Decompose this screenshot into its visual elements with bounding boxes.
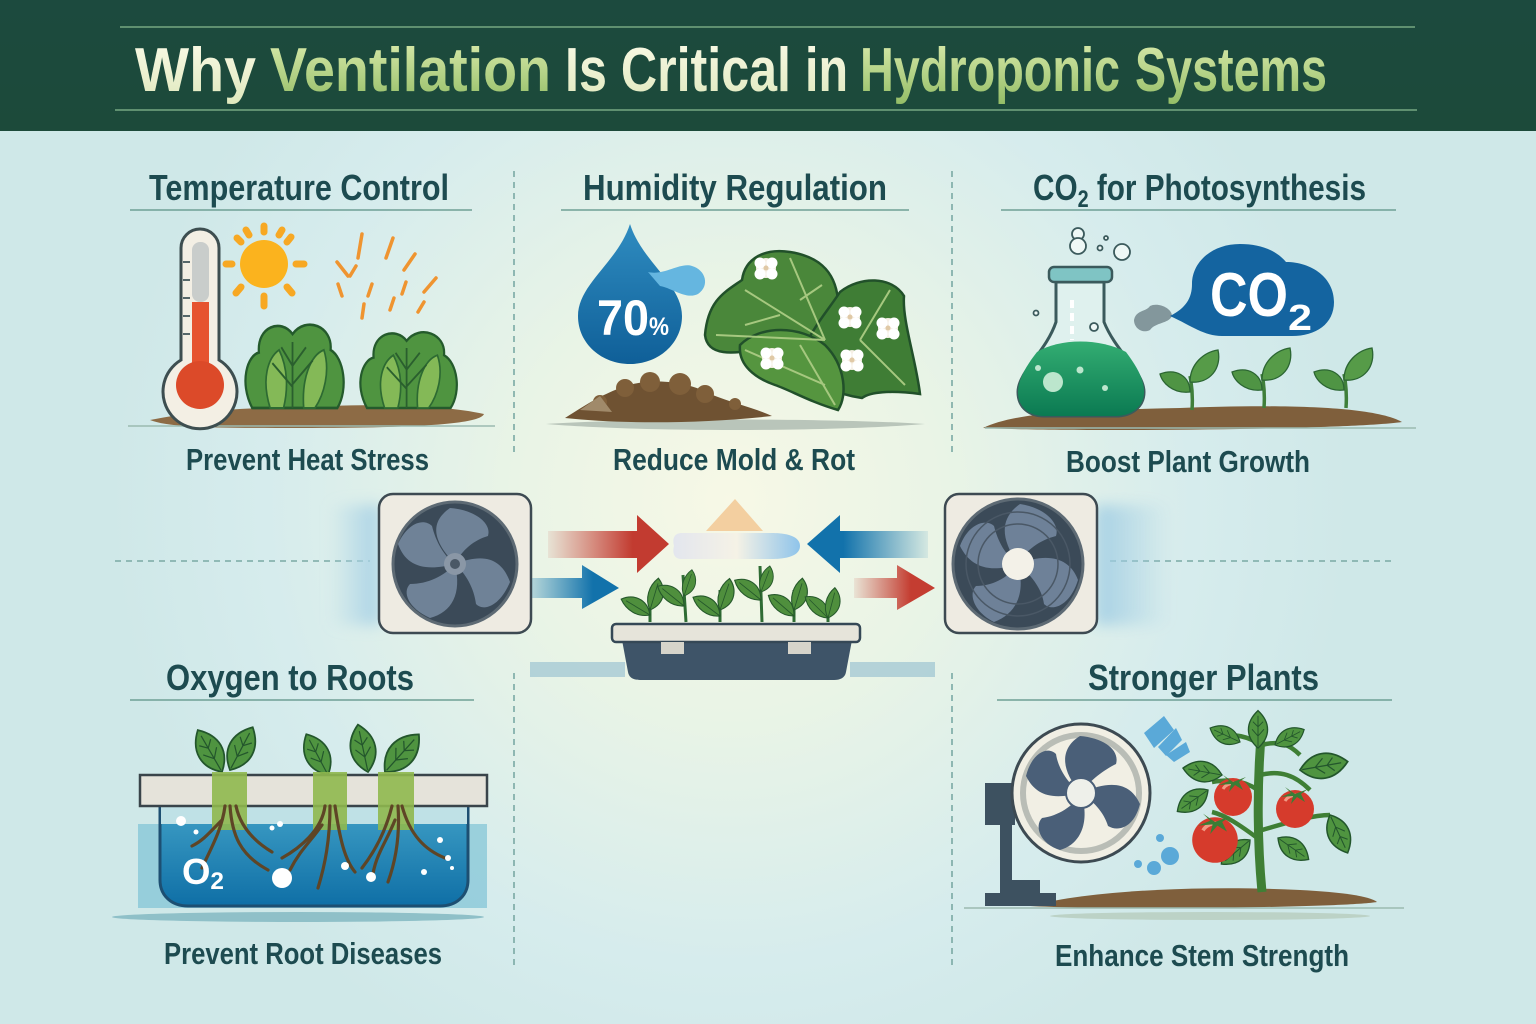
icon: air wisps xyxy=(1134,716,1190,875)
icon: standing fan xyxy=(985,724,1150,906)
icon: leafy plant with white flowers xyxy=(705,251,920,410)
icon: rising air triangle xyxy=(706,499,763,531)
icon: flask xyxy=(1018,267,1144,416)
arrow: red right (right) xyxy=(854,565,935,610)
arrow: red right (top left) xyxy=(548,515,669,573)
title: Systems xyxy=(1135,36,1327,105)
soil xyxy=(150,405,484,428)
dividers xyxy=(115,171,1392,967)
icon: thermometer xyxy=(163,229,237,429)
icon: hydroponic tray xyxy=(612,624,860,680)
arrow: blue left (top right) xyxy=(807,515,928,573)
label: O2 in water: 2 xyxy=(210,868,224,895)
heading: co2 for photosynthesis: for Photosynthesis xyxy=(1089,167,1366,208)
icon: soil mound xyxy=(546,372,925,430)
icon: CO2 cloud xyxy=(1170,244,1334,338)
title: Is Critical xyxy=(565,36,791,105)
label: reduce mold and rot: Reduce Mold & Rot xyxy=(613,442,855,477)
soil xyxy=(983,406,1402,430)
icon: bubbles xyxy=(1034,228,1130,331)
icon: water drop 70%: 70 xyxy=(597,290,649,346)
heading: oxygen to roots: Oxygen to Roots xyxy=(166,657,414,698)
icon: oxygen bubbles xyxy=(176,816,454,888)
panel: co2 for photosynthesis xyxy=(983,167,1416,479)
heading: co2 for photosynthesis: CO xyxy=(1033,167,1087,208)
heading: temperature control: Temperature Control xyxy=(149,167,449,208)
icon: roots xyxy=(192,806,445,888)
icon: tomato plant xyxy=(1172,711,1357,892)
panel: stronger plants xyxy=(964,657,1404,973)
panel: humidity regulation xyxy=(546,167,925,477)
header banner xyxy=(0,0,1536,131)
icon: tray lid xyxy=(140,775,487,806)
label: prevent heat stress: Prevent Heat Stress xyxy=(186,442,429,477)
shadow xyxy=(112,912,484,922)
heading: humidity regulation: Humidity Regulation xyxy=(583,167,887,208)
title xyxy=(135,36,1327,105)
title: in xyxy=(805,36,848,105)
icon: CO2 cloud: CO xyxy=(1210,261,1288,330)
icon: CO2 cloud: 2 xyxy=(1288,297,1312,338)
icon: right fan xyxy=(945,494,1097,633)
icon: gas puff xyxy=(1134,305,1172,331)
label: O2 in water: O xyxy=(182,851,210,892)
icon: water drop 70% xyxy=(578,224,705,364)
panel: oxygen to roots xyxy=(112,657,487,971)
heading: co2 for photosynthesis: 2 xyxy=(1078,186,1089,213)
panel: temperature control xyxy=(128,167,495,477)
title: Why xyxy=(135,36,256,105)
arrow: blue right (left) xyxy=(532,565,619,609)
label: prevent root diseases: Prevent Root Diseases xyxy=(164,936,442,971)
title: Ventilation xyxy=(270,36,551,105)
icon: water drop 70%: % xyxy=(649,313,669,341)
light blue floor bands xyxy=(530,662,935,677)
icon: left fan xyxy=(379,494,531,633)
icon: lettuce plants xyxy=(245,325,457,408)
icon: sprouts xyxy=(1160,348,1373,410)
icon: plant leaves xyxy=(187,721,428,781)
icon: stems xyxy=(212,772,414,830)
heading: stronger plants: Stronger Plants xyxy=(1088,657,1319,698)
label: boost plant growth: Boost Plant Growth xyxy=(1066,444,1310,479)
icon: heat sparks xyxy=(337,234,436,318)
icon: air capsule arrow xyxy=(673,533,800,559)
icon: seedlings xyxy=(620,566,847,624)
icon: sun xyxy=(226,226,304,306)
air haze xyxy=(330,505,380,625)
title: Hydroponic xyxy=(860,36,1120,105)
icon: water reservoir xyxy=(138,806,487,908)
panel: central airflow diagram xyxy=(330,494,1170,680)
label: enhance stem strength: Enhance Stem Strength xyxy=(1055,938,1349,973)
soil xyxy=(1030,888,1377,908)
